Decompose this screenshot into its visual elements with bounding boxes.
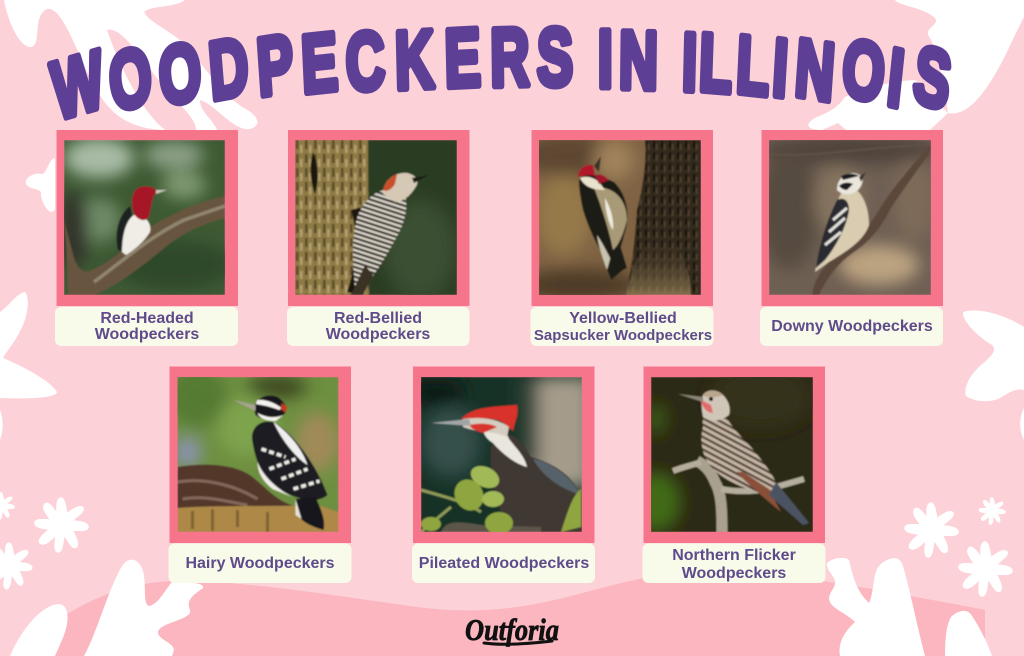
- label text: Woodpeckers: [682, 565, 786, 582]
- card: Hairy Woodpeckers: [168, 366, 352, 583]
- card: Yellow-Bellied Sapsucker Woodpeckers: [519, 130, 714, 346]
- label text: Woodpeckers: [326, 326, 430, 343]
- frame: [56, 130, 238, 306]
- frame: [413, 366, 594, 543]
- label text: Red-Bellied: [334, 310, 422, 327]
- frame: [644, 366, 825, 543]
- logo: Outforia: Outforia: [465, 612, 559, 647]
- label text: Downy Woodpeckers: [771, 318, 933, 335]
- label text: Northern Flicker: [672, 547, 796, 564]
- title: WOODPECKERS IN ILLINOIS: [47, 11, 956, 137]
- label text: Yellow-Bellied: [569, 310, 677, 327]
- card: Northern Flicker Woodpeckers: [631, 366, 826, 583]
- card: Red-Headed Woodpeckers: [55, 130, 238, 346]
- label text: Woodpeckers: [95, 326, 199, 343]
- photo: red-bellied woodpecker on a trunk: [295, 140, 457, 295]
- photo: northern flicker on a branch: [651, 377, 813, 532]
- frame: [288, 130, 470, 306]
- label: [55, 307, 238, 346]
- bottom wave band: [55, 575, 985, 656]
- label: [530, 307, 714, 346]
- label text: Sapsucker Woodpeckers: [534, 327, 712, 344]
- label: [412, 544, 595, 583]
- label text: Pileated Woodpeckers: [419, 555, 589, 572]
- label: [642, 544, 826, 583]
- card: Red-Bellied Woodpeckers: [287, 130, 470, 346]
- label text: Red-Headed: [100, 310, 194, 327]
- photo: downy woodpecker on a branch: [769, 140, 931, 295]
- card: Downy Woodpeckers: [759, 130, 943, 346]
- label text: Hairy Woodpeckers: [185, 555, 335, 572]
- card: Pileated Woodpeckers: [406, 366, 595, 583]
- photo: hairy woodpecker on a log: [178, 377, 338, 532]
- photo: red-headed woodpecker on a branch: [64, 140, 225, 295]
- label: [760, 307, 943, 346]
- frame: [170, 366, 351, 543]
- frame: [532, 130, 713, 306]
- label: [287, 307, 470, 346]
- photo: yellow-bellied sapsucker on a trunk: [539, 140, 701, 295]
- label: [168, 544, 352, 583]
- frame: [762, 130, 943, 306]
- photo: pileated woodpecker with leaves: [421, 377, 582, 532]
